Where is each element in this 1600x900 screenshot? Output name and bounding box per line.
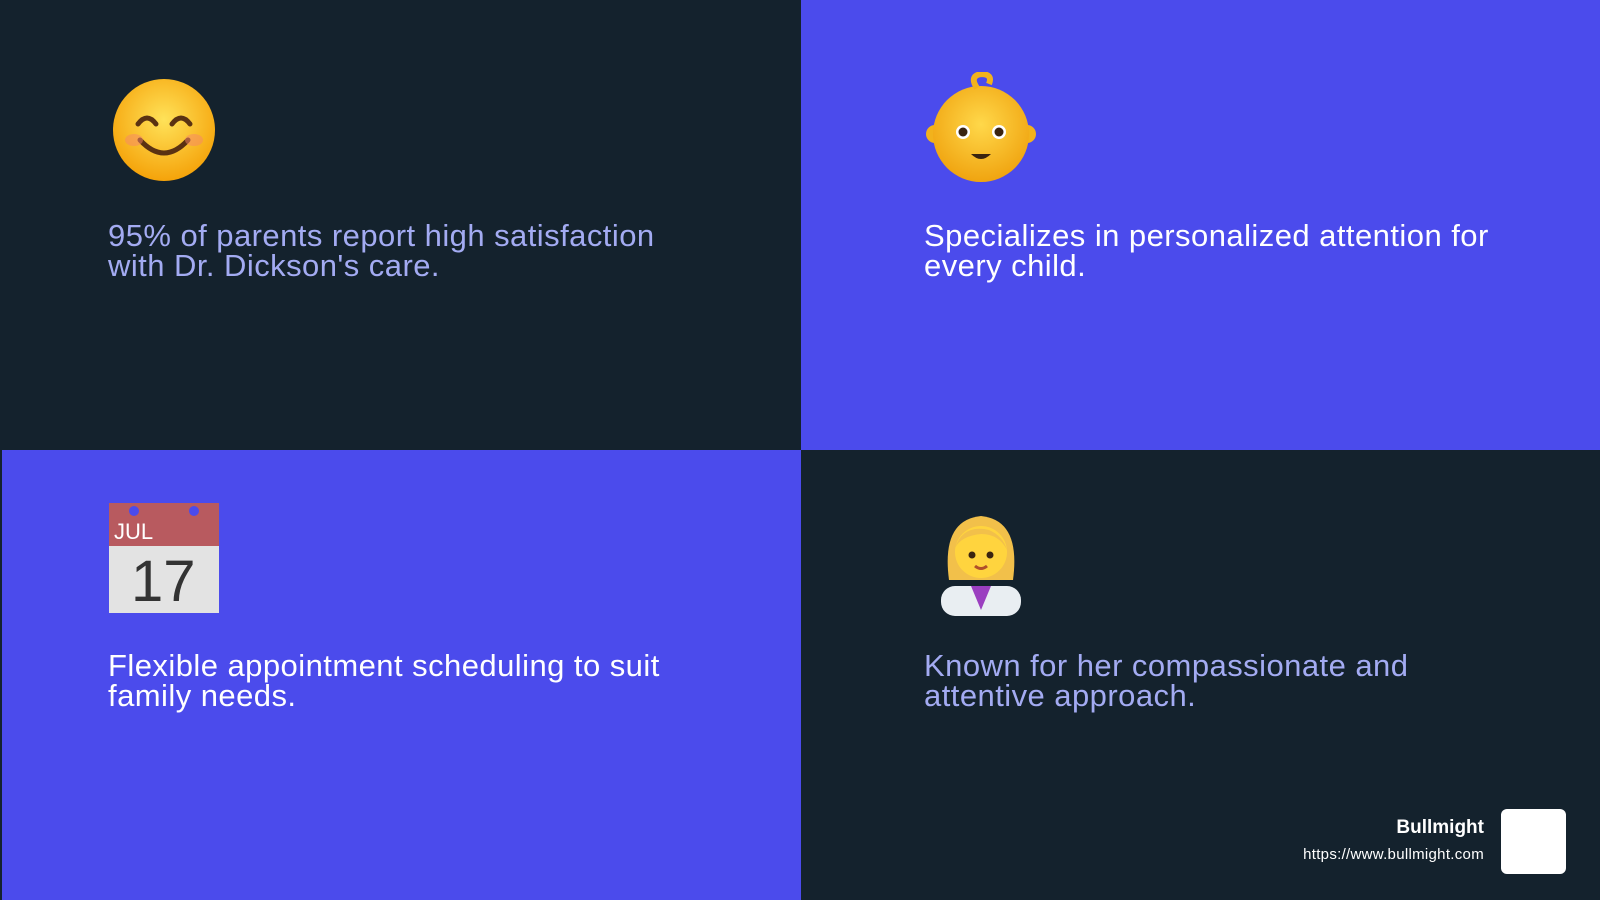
text: satisfaction: 95% of parents report high satisfaction with Dr. Dickson's care. <box>108 218 655 283</box>
text: compassionate approach: Known for her compassionate and attentive approach. <box>924 648 1408 713</box>
icon: baby face <box>926 72 1036 182</box>
icon: woman health worker <box>941 516 1021 616</box>
panel: flexible scheduling (bottom-left) <box>2 450 801 900</box>
icon: smiling face <box>113 79 215 181</box>
branding: Bullmight: Bullmight <box>1396 817 1484 838</box>
panel: compassionate approach (bottom-right) <box>801 450 1600 900</box>
panel: personalized attention (top-right) <box>801 0 1600 450</box>
icon: calendar: 17 <box>131 549 196 613</box>
text: personalized attention: Specializes in personalized attention for every child. <box>924 218 1489 283</box>
icon: calendar: JUL <box>114 519 153 544</box>
panel: satisfaction (top-left) <box>2 0 801 450</box>
icon: calendar <box>109 503 219 613</box>
branding: Bullmight <box>1303 817 1484 863</box>
text: flexible scheduling: Flexible appointment scheduling to suit family needs. <box>108 648 660 713</box>
logo: white square <box>1501 809 1566 874</box>
branding: Bullmight: https://www.bullmight.com <box>1303 846 1484 863</box>
